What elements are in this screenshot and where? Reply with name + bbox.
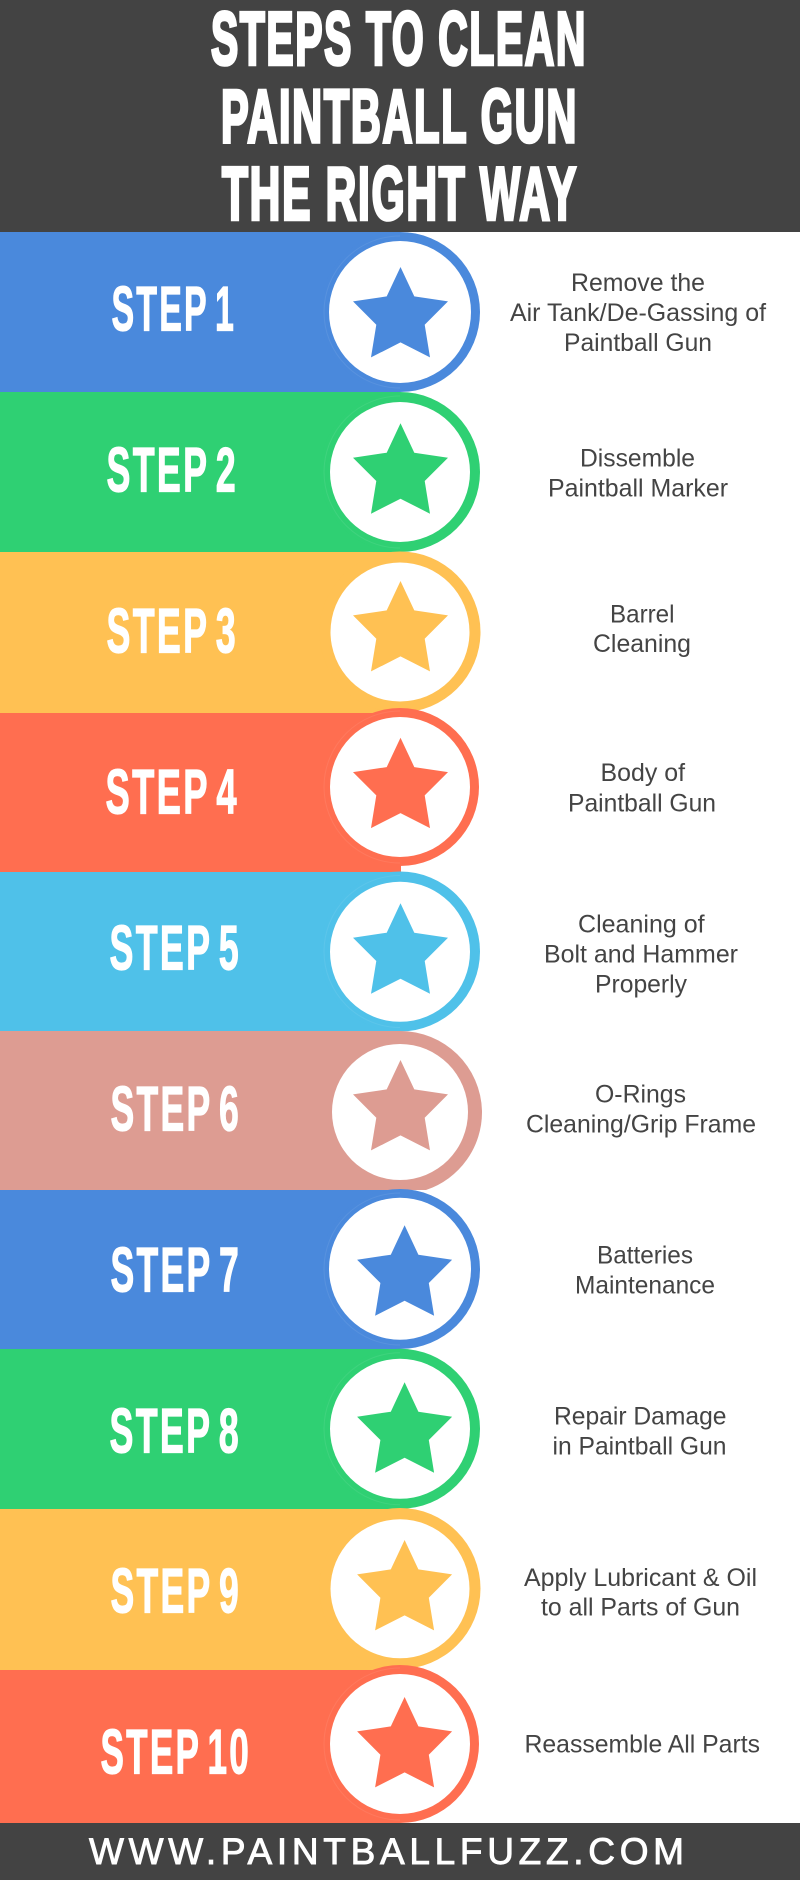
panel: step 6 (0, 1031, 756, 1190)
description: step 5: Bolt and Hammer (544, 940, 738, 968)
description: step 9 (524, 1564, 757, 1622)
description: step 5: Cleaning of (578, 910, 705, 938)
icon: star (353, 738, 448, 828)
panel: step 4 (0, 708, 716, 872)
label: step 8: STEP 8 (110, 1396, 241, 1466)
description: step 8: in Paintball Gun (552, 1432, 726, 1460)
description: step 1: Remove the (571, 269, 705, 297)
label: step 10: STEP 10 (100, 1718, 251, 1788)
description: step 9: to all Parts of Gun (541, 1594, 740, 1622)
icon: star (353, 423, 448, 514)
description: step 6 (526, 1080, 756, 1138)
panel: step 5 (0, 872, 738, 1032)
label: step 4: STEP 4 (106, 758, 239, 828)
panel: step 9 (0, 1508, 757, 1670)
description: step 7 (575, 1241, 715, 1299)
description: step 5: Properly (595, 970, 687, 998)
panel: step 7 (0, 1189, 715, 1349)
description: step 2 (548, 445, 728, 503)
label: step 6: STEP 6 (110, 1075, 241, 1145)
footer panel (0, 1823, 800, 1880)
panel: step 8 (0, 1349, 726, 1509)
description: step 2: Dissemble (580, 445, 695, 473)
label: step 5: STEP 5 (110, 914, 241, 984)
description: step 9: Apply Lubricant & Oil (524, 1564, 757, 1592)
icon: star (357, 1697, 452, 1787)
label: step 3: STEP 3 (106, 596, 238, 666)
panel: step 1 (0, 232, 766, 392)
label: step 1: STEP 1 (112, 274, 236, 344)
title (211, 0, 587, 236)
description: step 3 (593, 601, 691, 658)
description: step 8: Repair Damage (554, 1402, 726, 1430)
icon: star (357, 1540, 452, 1630)
description: step 1: Paintball Gun (564, 329, 712, 357)
header panel (0, 0, 800, 236)
label: step 7: STEP 7 (110, 1236, 241, 1306)
description: step 8 (552, 1402, 726, 1460)
footer url: WWW.PAINTBALLFUZZ.COM (89, 1831, 684, 1872)
icon: star (353, 903, 448, 994)
panel: step 3 (0, 552, 691, 713)
description: step 6: Cleaning/Grip Frame (526, 1110, 756, 1138)
description: step 4: Paintball Gun (568, 790, 716, 818)
icon: star (357, 1382, 452, 1473)
icon: star (353, 581, 448, 671)
description: step 2: Paintball Marker (548, 475, 728, 503)
description: step 4 (568, 759, 716, 818)
description: step 6: O-Rings (595, 1080, 686, 1108)
panel: step 2 (0, 392, 728, 552)
description: step 10: Reassemble All Parts (524, 1731, 760, 1759)
icon: star (353, 267, 448, 357)
description: step 3: Barrel (610, 601, 674, 629)
icon: star (353, 1060, 448, 1150)
description: step 1: Air Tank/De-Gassing of (510, 299, 766, 327)
description: step 7: Batteries (597, 1241, 693, 1269)
description: step 3: Cleaning (593, 630, 691, 658)
panel: step 10 (0, 1665, 760, 1823)
label: step 2: STEP 2 (106, 436, 238, 506)
description: step 7: Maintenance (575, 1271, 715, 1299)
icon: star (357, 1225, 452, 1316)
description: step 4: Body of (600, 759, 685, 787)
description: step 1 (510, 269, 766, 357)
description: step 5 (544, 910, 738, 998)
label: step 9: STEP 9 (110, 1556, 241, 1626)
